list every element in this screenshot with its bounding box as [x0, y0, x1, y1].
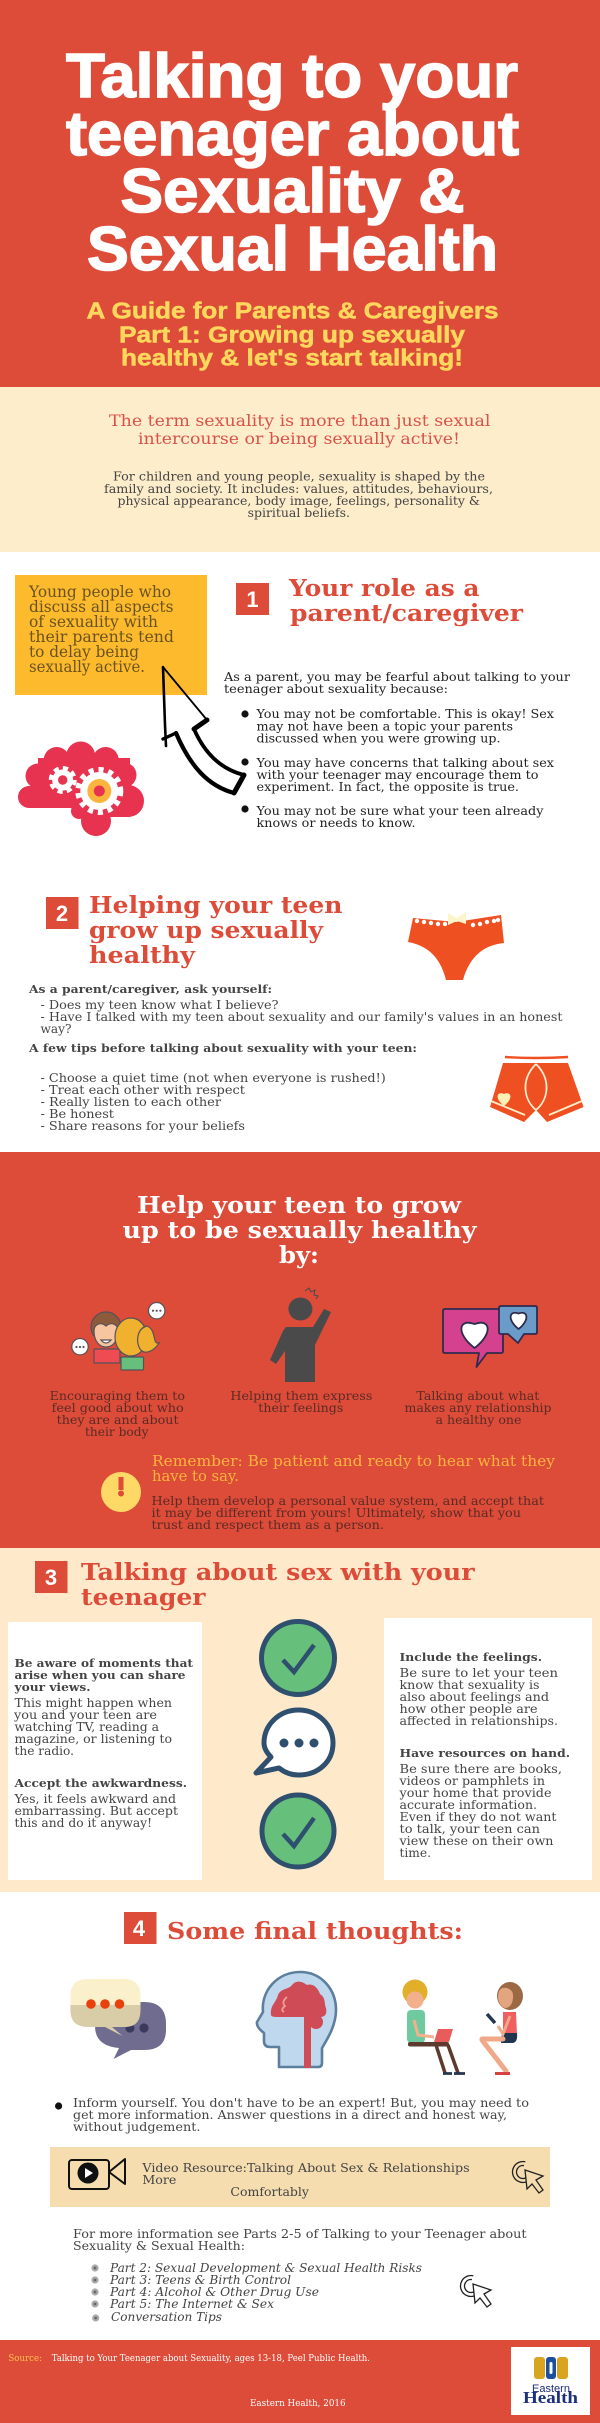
panel: section 4 final thoughts [50, 1912, 550, 2324]
list: reasons for fear: You may not be sure what your teen already [255, 804, 544, 818]
caption: healthy relationship [404, 1389, 552, 1427]
callout: yellow fact box: to delay being [29, 643, 139, 661]
callout: definition headline [109, 411, 490, 448]
callout: yellow fact box: of sexuality with [29, 613, 158, 631]
text block: definition body: physical appearance, body image, feelings, personality & [118, 494, 480, 508]
text block: fears intro [223, 670, 570, 696]
heading: talking about sex: Talking about sex with your [81, 1559, 476, 1586]
callout: yellow fact box: Young people who [28, 583, 171, 601]
callout: definition headline: The term sexuality is more than just sexual [109, 411, 490, 430]
text block: inform yourself: without judgement. [73, 2120, 200, 2134]
panel: right tips: videos or pamphlets in [398, 1774, 545, 1788]
panel: right tips: time. [400, 1846, 431, 1860]
text block: tips: - Be honest [40, 1107, 114, 1121]
heading: helping your teen [89, 892, 343, 969]
caption: encouraging: Encouraging them to [50, 1389, 185, 1403]
icon: number 1 [236, 583, 269, 615]
caption: healthy relationship: Talking about what [416, 1389, 540, 1403]
list: parts [91, 2261, 422, 2324]
panel: help your teen grow [0, 1152, 600, 1548]
text block: tips: - Choose a quiet time (not when everyone is rushed!) [40, 1071, 386, 1085]
logo: Eastern Health: Health [523, 2388, 579, 2407]
callout: yellow fact box: discuss all aspects [29, 598, 174, 616]
text block: definition body: spiritual beliefs. [248, 506, 350, 520]
text: source: Source: [8, 2354, 42, 2364]
heading: helping your teen: grow up sexually [89, 917, 324, 944]
text block: more information [73, 2227, 527, 2253]
heading: talking about sex [81, 1559, 476, 1611]
list: parts: Part 4: Alcohol & Other Drug Use [109, 2285, 319, 2299]
heading: Help your teen to grow [137, 1192, 462, 1219]
subtitle: A Guide for Parents & Caregivers [86, 298, 498, 324]
heading: talking about sex: teenager [81, 1584, 206, 1611]
icon: two girls talking [72, 1302, 165, 1370]
text block: ask yourself: - Does my teen know what I believe? [40, 998, 278, 1012]
icon: number 3 [35, 1561, 68, 1593]
caption: encouraging: they are and about [57, 1413, 179, 1427]
title: Talking to your [66, 42, 518, 111]
panel: right tips: Even if they do not want [400, 1810, 557, 1824]
list: parts: Part 3: Teens & Birth Control [109, 2273, 291, 2287]
list: reasons for fear: with your teenager may encourage them to [256, 768, 538, 782]
icon: check mark bottom [262, 1795, 334, 1867]
panel: section 2 helping your teen [28, 892, 584, 1133]
text block: ask yourself: - Have I talked with my teen about sexuality and our family's values in an honest [40, 1010, 563, 1024]
text block: tips: A few tips before talking about sexuality with your teen: [28, 1041, 417, 1055]
panel: right tips: Include the feelings. [400, 1650, 542, 1664]
text: video resource title: Comfortably [230, 2185, 309, 2199]
icon: heart speech bubbles [443, 1306, 537, 1367]
text block: inform yourself: get more information. Answer questions in a direct and honest way, [73, 2108, 507, 2122]
callout: remember: Remember: Be patient and ready to hear what they [152, 1452, 556, 1470]
heading: by: [279, 1242, 319, 1269]
list: parts: Part 2: Sexual Development & Sexual Health Risks [109, 2261, 422, 2275]
text block: definition body: For children and young people, sexuality is shaped by the [113, 470, 485, 484]
panel: left tips: this and do it anyway! [14, 1816, 152, 1830]
icon: check mark top [262, 1622, 334, 1694]
subtitle: healthy & let's start talking! [121, 344, 463, 370]
icon: number 4 [124, 1912, 156, 1944]
icon: exclamation [101, 1472, 141, 1512]
logo: Eastern Health: Eastern [532, 2383, 570, 2395]
panel: left tips: you and your teen are [13, 1708, 157, 1722]
heading: helping your teen: healthy [89, 942, 196, 969]
list: reasons for fear: experiment. In fact, the opposite is true. [256, 780, 519, 794]
list: parts: Conversation Tips [111, 2310, 222, 2324]
caption: express feelings: Helping them express [230, 1389, 372, 1403]
title: Sexual Health [87, 215, 498, 284]
heading [122, 1192, 477, 1269]
icon: boy and girl on devices [402, 1980, 523, 2074]
icon: head with brain [257, 1972, 336, 2068]
list: reasons for fear: knows or needs to know. [256, 816, 416, 830]
panel: header [0, 0, 600, 387]
subtitle: Part 1: Growing up sexually [119, 322, 465, 348]
panel: right tips: accurate information. [400, 1798, 537, 1812]
panel: left tips: embarrassing. But accept [14, 1804, 178, 1818]
text block: fears intro: As a parent, you may be fearful about talking to your [223, 670, 570, 684]
callout: yellow fact box: their parents tend [29, 628, 174, 646]
list: reasons for fear [241, 707, 554, 830]
text block: inform yourself: Inform yourself. You don't have to be an expert! But, you may need to [73, 2096, 529, 2110]
text block: definition body: family and society. It includes: values, attitudes, behaviours, [104, 482, 493, 496]
icon: click cursor [509, 2158, 543, 2193]
heading: up to be sexually healthy [122, 1217, 477, 1244]
icon: underwear boxers [490, 1057, 584, 1122]
list: parts: Part 5: The Internet & Sex [109, 2297, 274, 2311]
text block: ask yourself [28, 982, 563, 1036]
icon: person raising hand [270, 1288, 331, 1382]
panel: left tips: magazine, or listening to [14, 1732, 172, 1746]
caption: encouraging [50, 1389, 185, 1439]
logo: Eastern Health [511, 2347, 590, 2415]
title: teenager about [66, 100, 519, 169]
panel: right tips: know that sexuality is [400, 1678, 540, 1692]
panel: right tips: Be sure to let your teen [400, 1666, 558, 1680]
panel: right tips [384, 1618, 592, 1880]
list: reasons for fear: may not have been a topic your parents [256, 720, 513, 734]
text block: fears intro: teenager about sexuality because: [224, 682, 448, 696]
panel: sexuality definition [0, 387, 600, 552]
panel: right tips: Have resources on hand. [400, 1746, 570, 1760]
heading: final thoughts: Some final thoughts: [167, 1918, 463, 1945]
caption: healthy relationship: a healthy one [436, 1413, 522, 1427]
title [66, 42, 519, 284]
callout: definition headline: intercourse or being sexually active! [138, 429, 460, 448]
heading: helping your teen: Helping your teen [89, 892, 343, 919]
caption: encouraging: feel good about who [52, 1401, 184, 1415]
text: video resource title [141, 2161, 470, 2199]
panel: section 3 talking about sex [0, 1548, 600, 1892]
callout: yellow fact box: sexually active. [29, 658, 145, 676]
caption: express feelings [230, 1389, 372, 1415]
panel: left tips: your views. [13, 1680, 90, 1694]
text: source: Talking to Your Teenager about Sexuality, ages 13-18, Peel Public Health. [52, 2354, 370, 2364]
text block: definition body [104, 470, 493, 520]
icon: video camera [69, 2159, 125, 2189]
callout: yellow fact box [15, 575, 207, 695]
text block: more information: For more information see Parts 2-5 of Talking to your Teenager about [73, 2227, 527, 2241]
panel: left tips: watching TV, reading a [14, 1720, 159, 1734]
panel: left tips: the radio. [14, 1744, 74, 1758]
callout: remember: Help them develop a personal value system, and accept that [152, 1494, 544, 1508]
icon: two speech bubbles [70, 1979, 166, 2059]
panel: left tips [8, 1622, 202, 1880]
icon: brain with gears [18, 742, 144, 836]
icon: underwear briefs [408, 912, 504, 980]
caption: express feelings: their feelings [258, 1401, 343, 1415]
list: reasons for fear: You may not be comfortable. This is okay! Sex [255, 707, 554, 721]
panel: right tips: your home that provide [398, 1786, 552, 1800]
panel: left tips: arise when you can share [14, 1668, 186, 1682]
panel: left tips: Accept the awkwardness. [13, 1776, 187, 1790]
icon: number 2: 2 [56, 901, 68, 926]
panel: right tips: view these on their own [398, 1834, 554, 1848]
text block: tips [28, 1041, 417, 1133]
panel: left tips: Be aware of moments that [14, 1656, 194, 1670]
panel: right tips: also about feelings and [400, 1690, 549, 1704]
panel: left tips: Yes, it feels awkward and [13, 1792, 176, 1806]
text block: ask yourself: way? [40, 1022, 72, 1036]
icon: number 4: 4 [133, 1916, 146, 1941]
list: reasons for fear: You may have concerns that talking about sex [255, 756, 554, 770]
text block: tips: - Treat each other with respect [40, 1083, 245, 1097]
subtitle [86, 298, 498, 370]
icon: number 2 [46, 897, 78, 929]
panel: left tips: This might happen when [14, 1696, 172, 1710]
panel: right tips: how other people are [400, 1702, 538, 1716]
panel: right tips: Be sure there are books, [400, 1762, 562, 1776]
text block: ask yourself: As a parent/caregiver, ask yourself: [28, 982, 272, 996]
panel: section 1 your role [15, 575, 570, 836]
title: Sexuality & [120, 157, 464, 226]
icon: speech bubble [256, 1710, 333, 1775]
text block: more information: Sexuality & Sexual Health: [73, 2239, 245, 2253]
callout: remember: it may be different from yours! Ultimately, show that you [152, 1506, 521, 1520]
callout: remember [152, 1452, 556, 1532]
heading: your role: parent/caregiver [290, 600, 524, 627]
caption: encouraging: their body [85, 1425, 149, 1439]
panel: footer [0, 2340, 600, 2423]
icon: number 3: 3 [45, 1565, 57, 1590]
text block: tips: - Share reasons for your beliefs [40, 1119, 245, 1133]
heading: your role: Your role as a [288, 575, 480, 602]
list: reasons for fear: discussed when you were growing up. [256, 732, 500, 746]
callout: remember: trust and respect them as a person. [152, 1518, 384, 1532]
panel: right tips: to talk, your teen can [400, 1822, 540, 1836]
panel: right tips: affected in relationships. [400, 1714, 558, 1728]
arrow: hand drawn [163, 667, 244, 793]
caption: healthy relationship: makes any relationship [404, 1401, 552, 1415]
text: video resource title: More [142, 2173, 176, 2187]
text: video resource title: Video Resource:Talking About Sex & Relationships [141, 2161, 470, 2175]
icon: number 1: 1 [246, 587, 259, 612]
icon: click cursor lower [457, 2272, 491, 2307]
callout: remember: have to say. [152, 1467, 239, 1485]
text block: inform yourself [55, 2096, 529, 2134]
text block: tips: - Really listen to each other [40, 1095, 221, 1109]
panel: video resource [50, 2147, 550, 2207]
text: credit: Eastern Health, 2016 [250, 2398, 346, 2409]
heading: your role [288, 575, 524, 627]
